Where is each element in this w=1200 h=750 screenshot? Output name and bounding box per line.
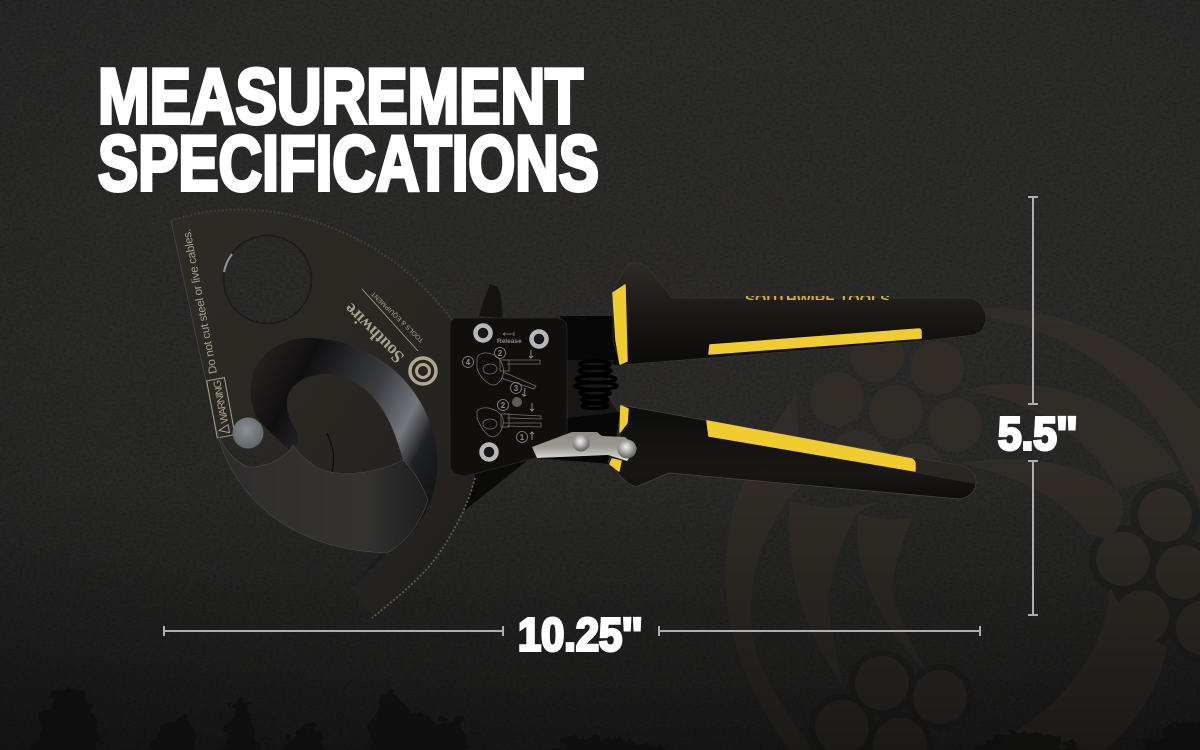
step numbers: 4: [466, 358, 471, 367]
plate indicator dot: [512, 397, 522, 407]
upper diagram: [477, 353, 540, 389]
warning box: WARNING: [211, 379, 231, 424]
step numbers: 2: [498, 349, 503, 358]
cover plate with instruction diagrams: [450, 318, 567, 476]
lower toothed arm under plate: [460, 456, 533, 510]
round hole outline: [224, 236, 312, 324]
tool: ratchet cable cutter: [171, 210, 986, 618]
step number badges: [462, 348, 528, 442]
title: SPECIFICATIONS: [98, 119, 599, 207]
step numbers: 1: [520, 433, 525, 442]
yellow stripes: [610, 285, 921, 471]
tools and equipment tagline: TOOLS & EQUIPMENT: [370, 290, 425, 344]
left blade edge: [171, 221, 217, 432]
lower diagram: [477, 408, 541, 437]
fixed upper blade with serrated edge: [171, 210, 475, 618]
step arrows: [522, 350, 534, 440]
Southwire wordmark: Southwire: [340, 299, 408, 367]
pivot bolt: [232, 418, 264, 448]
coil spring: [575, 361, 617, 408]
step numbers: 3: [514, 384, 519, 393]
upper handle grip: [613, 263, 986, 365]
dimension: height line: [1028, 197, 1038, 615]
dimension: width line: [164, 626, 980, 636]
lower black arm: [534, 412, 620, 464]
serrated teeth along top edge: [171, 210, 452, 320]
latch: [532, 432, 637, 461]
round hole rim highlight: [224, 254, 232, 272]
crack visible through jaw opening: [327, 433, 334, 472]
grey link between arms: [566, 360, 618, 420]
release arrow: [503, 332, 514, 336]
dimension: height label: 5.5'': [998, 408, 1077, 460]
grime blotches along bottom edge: [30, 688, 1200, 750]
step numbers: 2: [501, 401, 506, 410]
title: [98, 52, 599, 207]
dimension: width label: 10.25'': [518, 608, 642, 660]
Southwire emblem: [410, 358, 436, 384]
release label: Release: [497, 338, 522, 345]
ratchet tooth: [479, 284, 503, 318]
serrated teeth along lower edge: [372, 478, 475, 618]
black arms behind grips: [560, 316, 620, 366]
lower handle lit tip: [915, 458, 976, 484]
swirl cutting edge of moving jaw: [251, 338, 437, 587]
hex nuts: [476, 326, 546, 460]
brand on upper handle: SOUTHWIRE TOOLS: [745, 291, 890, 307]
title: MEASUREMENT: [98, 52, 583, 140]
moving jaw: [217, 430, 428, 553]
step numbers: [466, 349, 525, 442]
warning text on blade: Do not cut steel or live cables.: [181, 228, 220, 375]
lower handle grip: [608, 405, 976, 499]
dark ring backing behind strands: [809, 480, 1200, 750]
watermark logo: cable strands and swooshes: [725, 308, 1200, 750]
warning box: [207, 378, 235, 438]
